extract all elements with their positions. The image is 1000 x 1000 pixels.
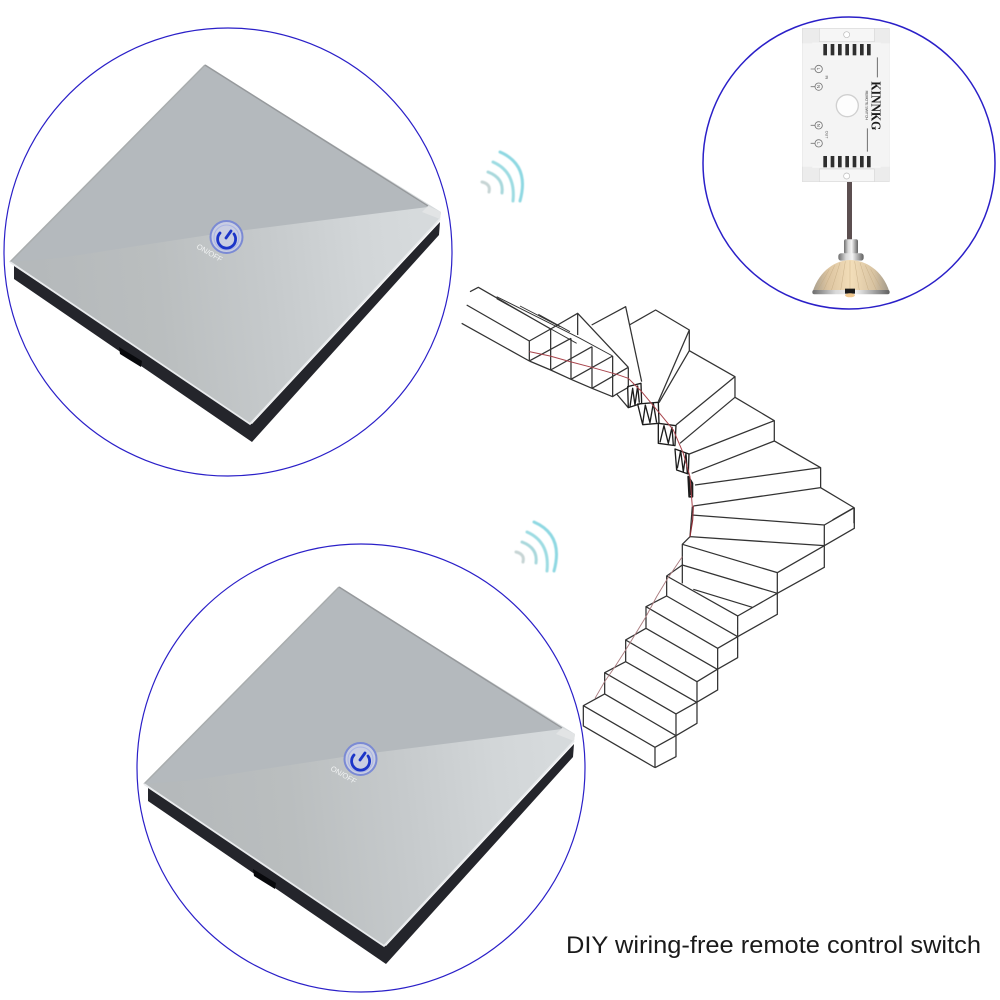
glass touch switch with power button (lower) (144, 587, 575, 964)
brand text: KINNKG (869, 81, 884, 130)
icon: wireless signal from first switch (482, 152, 522, 201)
receiver module: IN (824, 75, 828, 80)
hanging cord (847, 182, 852, 240)
red wire (529, 352, 692, 507)
terminal labels (811, 57, 877, 152)
receiver module: REMOTE SWITCH (864, 91, 868, 120)
icon: wireless signal from second switch (516, 522, 556, 571)
staircase upper section (462, 287, 854, 523)
caption: DIY wiring-free remote control switch (566, 932, 981, 959)
circle: first wall switch (4, 28, 452, 476)
receiver module (802, 28, 889, 182)
receiver module: OUT (824, 131, 828, 139)
pendant lamp (812, 239, 890, 297)
circle: second wall switch (137, 544, 585, 992)
glass touch switch with power button (10, 65, 441, 442)
receiver module: L (816, 142, 821, 145)
receiver module: N (816, 124, 821, 127)
red wire (595, 557, 682, 698)
receiver module: N (816, 85, 821, 88)
staircase lower section (583, 506, 854, 768)
zigzag wiring boxes (628, 383, 692, 497)
circle: receiver module and lamp (703, 17, 995, 309)
vent slots (823, 44, 871, 167)
receiver module: L (816, 68, 821, 71)
